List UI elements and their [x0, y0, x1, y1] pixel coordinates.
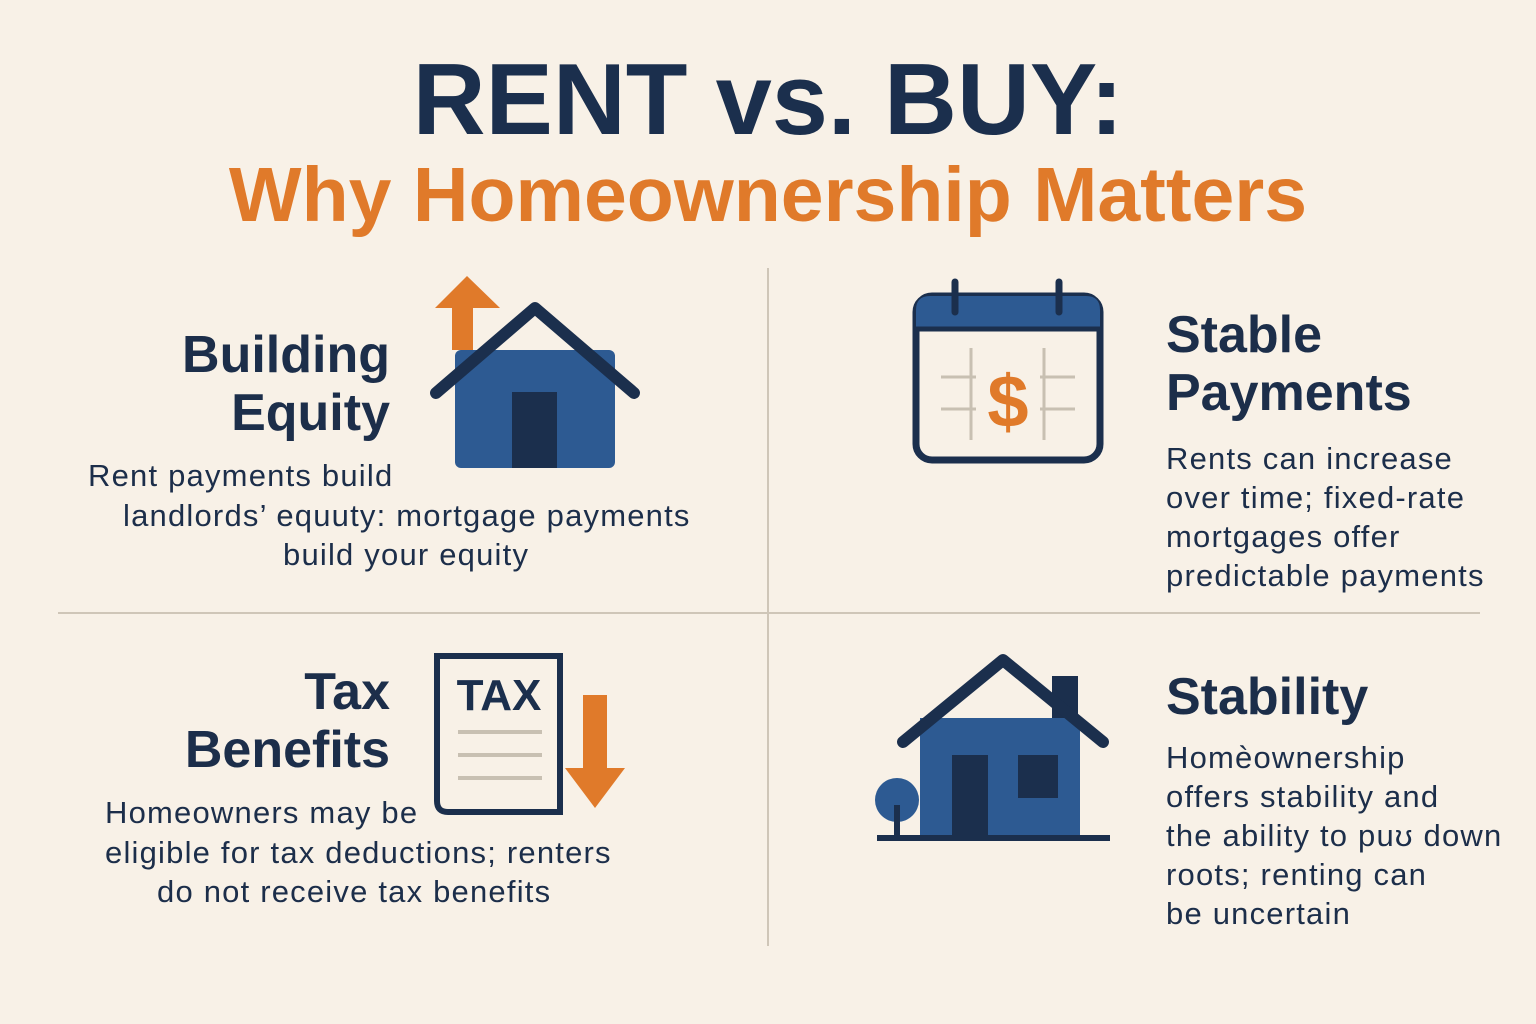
body text: offers stability and: [1166, 779, 1439, 814]
heading: tax benefits: Tax: [304, 663, 390, 721]
heading: stable payments: Stable: [1166, 306, 1322, 364]
icon: house with tree: [875, 654, 1110, 841]
heading: stability: Stability: [1166, 668, 1368, 726]
heading: stable payments: Payments: [1166, 364, 1412, 422]
icon: house with arrow: [430, 276, 640, 468]
heading: building equity: [182, 326, 390, 442]
panel: tax benefits: [105, 653, 625, 909]
body text: [1166, 740, 1502, 931]
panel: building equity: landlords’ equuty: mortgage payments: [123, 498, 691, 533]
panel: building equity: build your equity: [283, 537, 529, 572]
icon: tax document: TAX: [457, 671, 541, 720]
body text: Homèownership: [1166, 740, 1406, 775]
body text: mortgages offer: [1166, 519, 1401, 554]
body text: Homeowners may be: [105, 795, 418, 830]
body text: be uncertain: [1166, 896, 1351, 931]
heading: tax benefits: Benefits: [185, 721, 390, 779]
panel: building equity: [88, 276, 691, 572]
body text: predictable payments: [1166, 558, 1485, 593]
icon: calendar: $: [987, 360, 1029, 443]
body text: the ability to puʊ down: [1166, 818, 1502, 853]
body text: roots; renting can: [1166, 857, 1427, 892]
panel: tax benefits: eligible for tax deductions; renters: [105, 835, 612, 870]
heading: stable payments: [1166, 306, 1412, 422]
body text: over time; fixed-rate: [1166, 480, 1465, 515]
body text: Rent payments build: [88, 458, 393, 493]
subtitle: Why Homeownership Matters: [229, 152, 1307, 238]
body text: Rents can increase: [1166, 441, 1453, 476]
heading: building equity: Building: [182, 326, 390, 384]
heading: tax benefits: [185, 663, 390, 779]
icon: tax document: [434, 653, 625, 815]
panel: tax benefits: do not receive tax benefits: [157, 874, 551, 909]
body text: [1166, 441, 1485, 593]
heading: building equity: Equity: [231, 384, 390, 442]
panel: stability: [875, 654, 1502, 931]
icon: calendar: [912, 278, 1104, 464]
title: RENT vs. BUY:: [413, 44, 1123, 156]
panel: stable payments: [912, 278, 1485, 593]
